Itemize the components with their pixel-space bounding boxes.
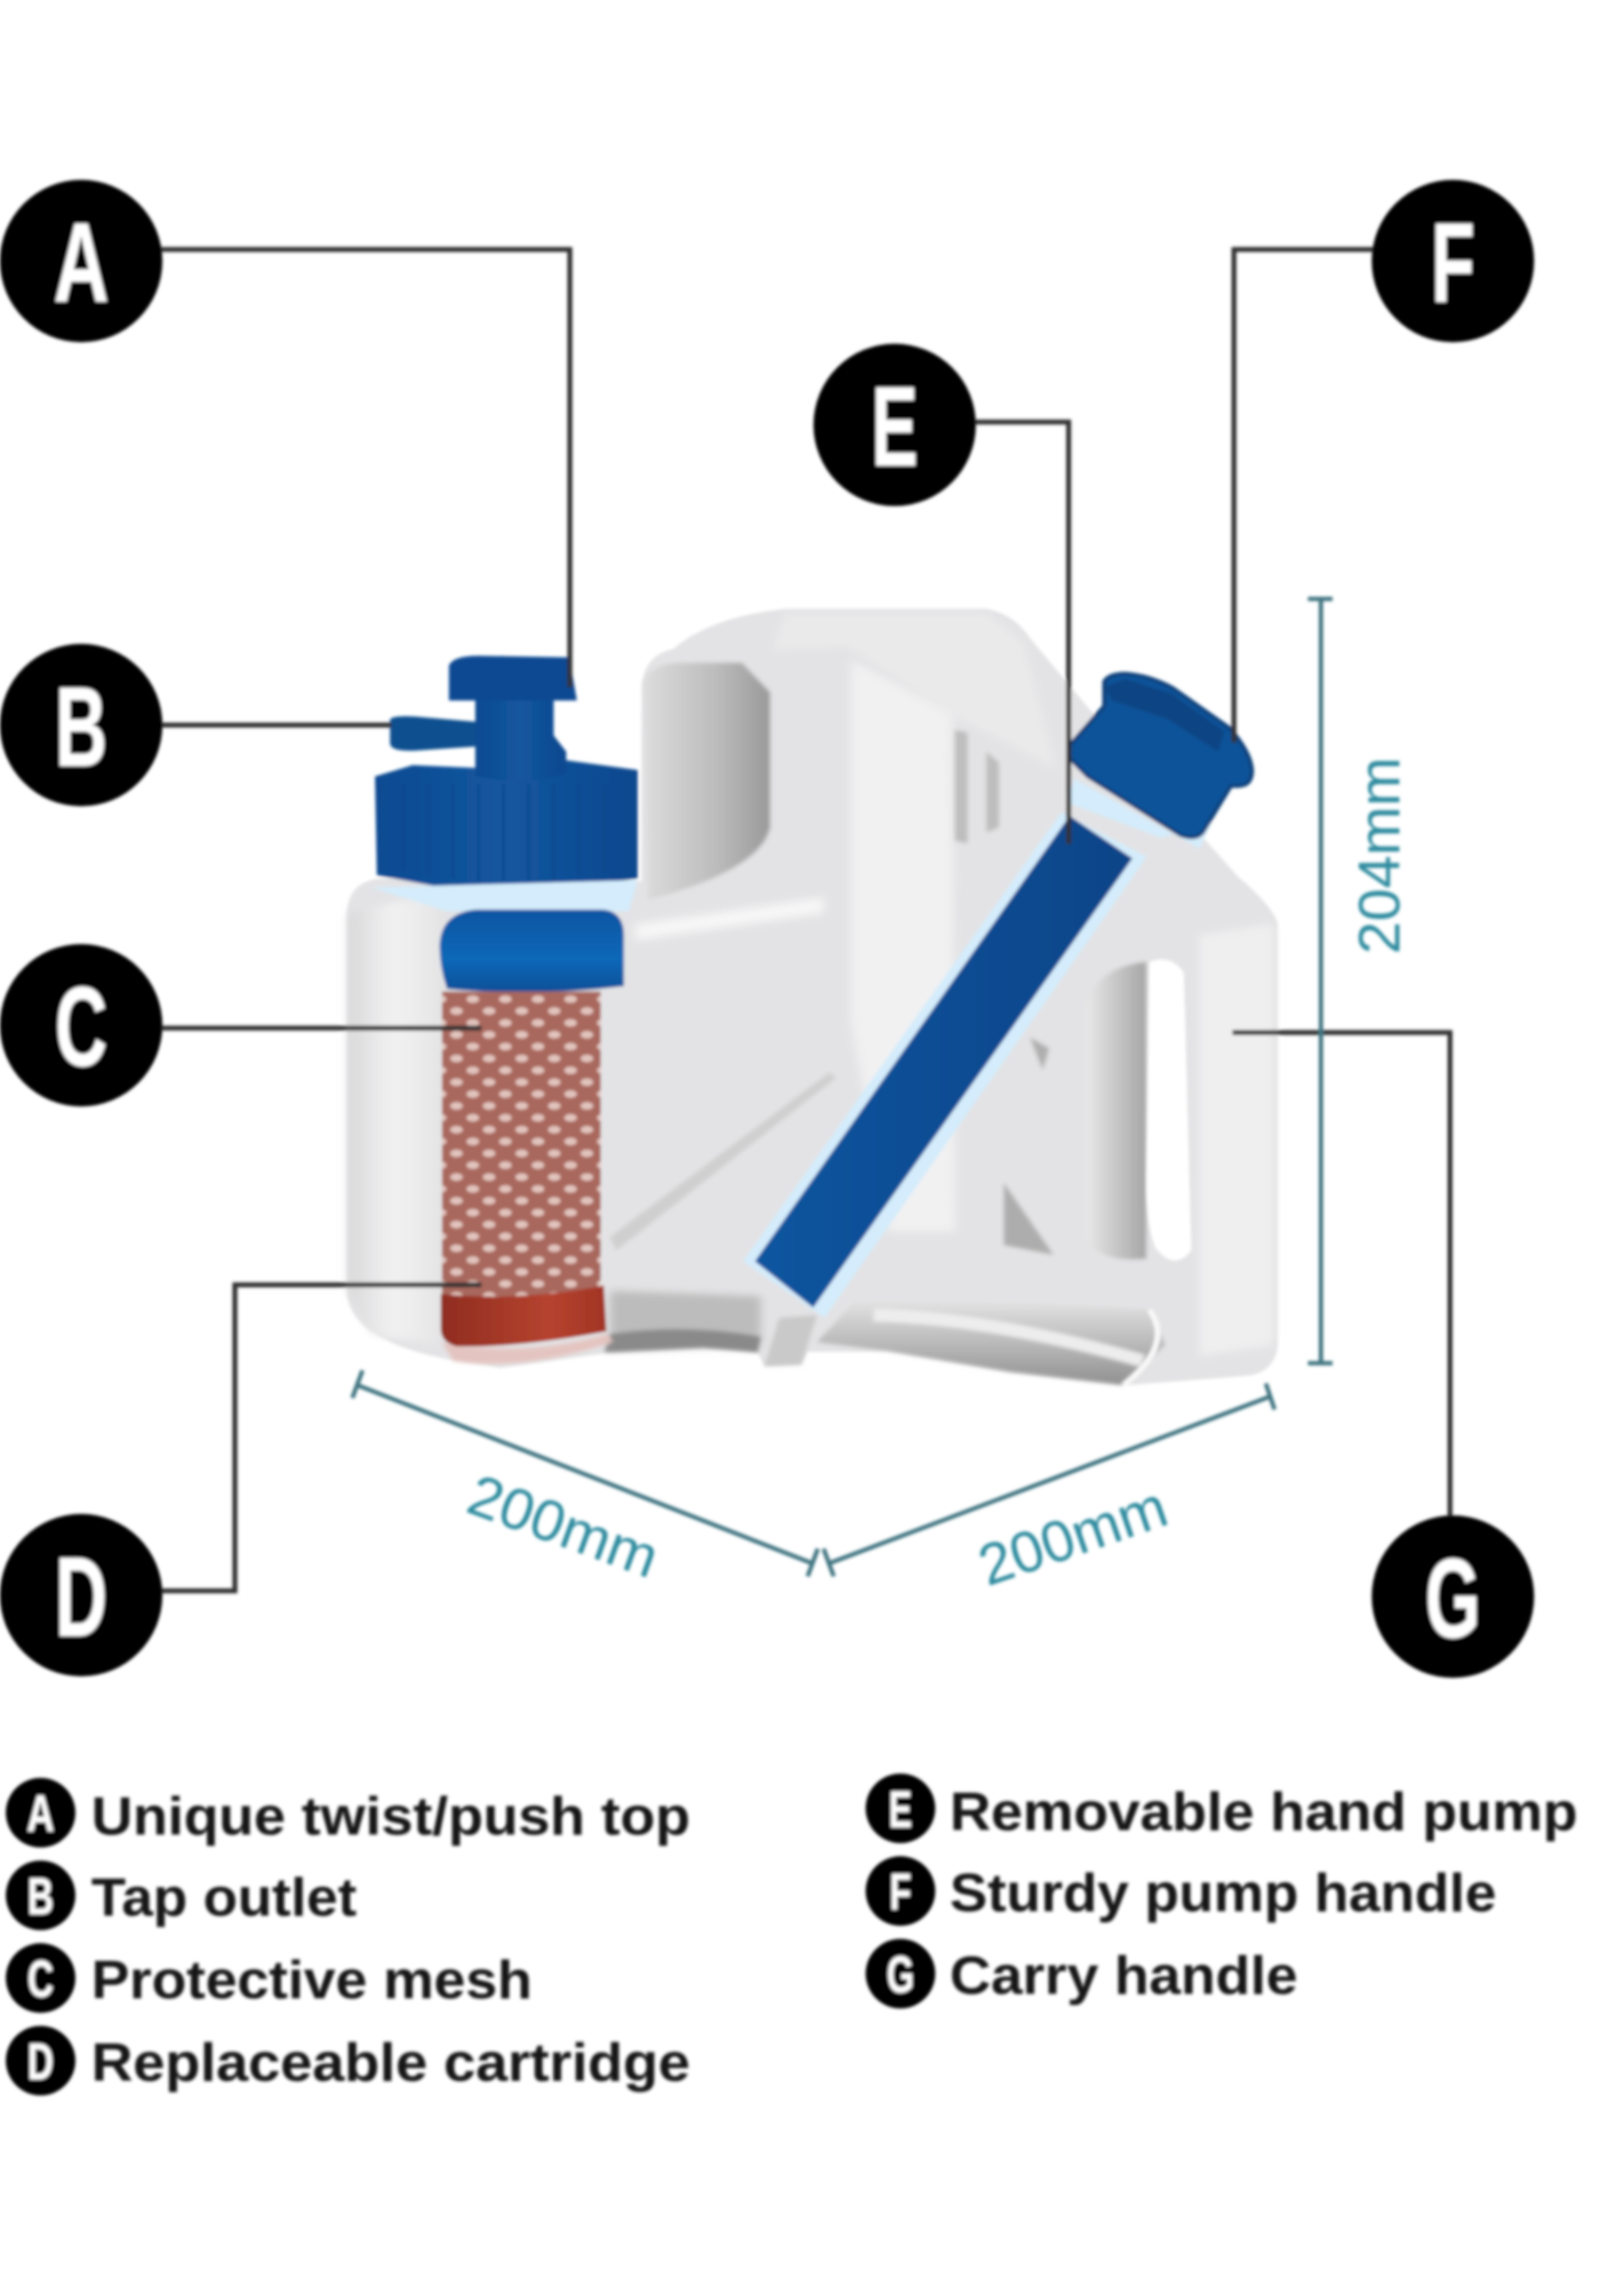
neck halo — [1068, 779, 1212, 848]
lower shading — [610, 1291, 761, 1350]
legend B — [6, 1860, 357, 1930]
legend E: Removable hand pump — [950, 1781, 1578, 1841]
top ridge — [773, 614, 1055, 768]
screw lid — [375, 760, 638, 890]
top knob — [449, 656, 577, 700]
callout G — [1233, 1032, 1535, 1678]
legend C: Protective mesh — [91, 1951, 532, 2011]
centre panel — [851, 660, 955, 1232]
legend D: Replaceable cartridge — [91, 2033, 690, 2093]
height bracket — [1307, 599, 1333, 1364]
badge D — [0, 1514, 162, 1676]
right bracket — [824, 1383, 1275, 1576]
soft shaded panels — [348, 614, 1273, 1356]
cartridge glow — [442, 1334, 613, 1364]
lower fold — [1004, 1037, 1054, 1254]
letter G: G — [1425, 1536, 1480, 1662]
pump handle — [1068, 673, 1252, 848]
handle hole — [1146, 960, 1191, 1260]
badge F — [1371, 180, 1535, 342]
stem — [475, 698, 566, 781]
badge G — [1371, 1515, 1535, 1678]
leader E — [971, 422, 1069, 844]
leader G — [1233, 1032, 1450, 1523]
upper recess — [645, 663, 770, 900]
leader F — [1234, 250, 1377, 742]
badge C — [0, 944, 162, 1106]
dimension: right width — [824, 1383, 1275, 1599]
legend E: E — [889, 1781, 912, 1839]
legend G: Carry handle — [950, 1946, 1298, 2006]
leader C — [159, 1026, 482, 1030]
callout D — [0, 1285, 482, 1676]
cartridge collar — [439, 909, 624, 992]
protective mesh — [442, 992, 601, 1296]
callout C — [0, 944, 482, 1106]
leader B — [159, 724, 391, 727]
letter D: D — [55, 1535, 107, 1661]
badge E — [813, 344, 976, 506]
legend: left column — [6, 1778, 690, 2095]
legend G — [866, 1939, 1298, 2009]
callout B — [0, 644, 391, 806]
loop — [1125, 1310, 1158, 1384]
handle grip — [1104, 679, 1225, 752]
foot — [765, 1315, 817, 1367]
legend B: Tap outlet — [91, 1868, 357, 1928]
handle recess — [1086, 962, 1146, 1259]
legend F: Sturdy pump handle — [950, 1863, 1496, 1923]
side rib — [955, 730, 999, 844]
legend: right column — [866, 1774, 1578, 2009]
dimension: height — [1307, 599, 1412, 1364]
legend B: B — [28, 1868, 54, 1926]
letter B: B — [55, 665, 107, 790]
left bottom shade — [605, 1329, 761, 1353]
leader D — [159, 1285, 482, 1591]
badge A — [0, 180, 162, 342]
handle side panel — [1199, 924, 1273, 1356]
leader A — [159, 250, 570, 687]
legend G: G — [887, 1947, 914, 2005]
left side panel — [348, 892, 440, 1345]
height label: 204mm — [1347, 757, 1412, 955]
left label: 200mm — [460, 1462, 667, 1591]
callout A — [0, 180, 570, 687]
letter E: E — [871, 365, 918, 491]
left bracket — [352, 1370, 818, 1576]
diagonal rib — [610, 1073, 836, 1251]
legend F: F — [890, 1864, 911, 1922]
handle cap — [1070, 673, 1252, 838]
cavity ridge — [873, 1315, 1143, 1361]
right label: 200mm — [970, 1474, 1176, 1599]
legend A: A — [27, 1785, 54, 1843]
legend D: D — [28, 2033, 54, 2091]
bottom cavity — [817, 1302, 1165, 1384]
callout E — [813, 344, 1069, 844]
pump tube — [755, 816, 1132, 1308]
pump halo — [743, 812, 1147, 1317]
jerrycan illustration — [347, 609, 1278, 1386]
legend C: C — [28, 1951, 54, 2009]
callout F — [1234, 180, 1535, 742]
letter C: C — [55, 964, 107, 1090]
legend A: Unique twist/push top — [91, 1786, 690, 1846]
tap outlet — [390, 716, 479, 751]
legend C — [6, 1944, 532, 2012]
jug body — [347, 609, 1278, 1386]
replaceable cartridge base — [440, 1285, 607, 1347]
letter A: A — [54, 201, 109, 326]
badge B — [0, 644, 162, 806]
lid ribs — [403, 784, 604, 881]
shelf highlight — [635, 898, 823, 941]
filter top cap — [372, 656, 638, 911]
dimension: left width — [352, 1370, 818, 1591]
lid halo — [372, 880, 638, 911]
letter F: F — [1431, 201, 1475, 326]
